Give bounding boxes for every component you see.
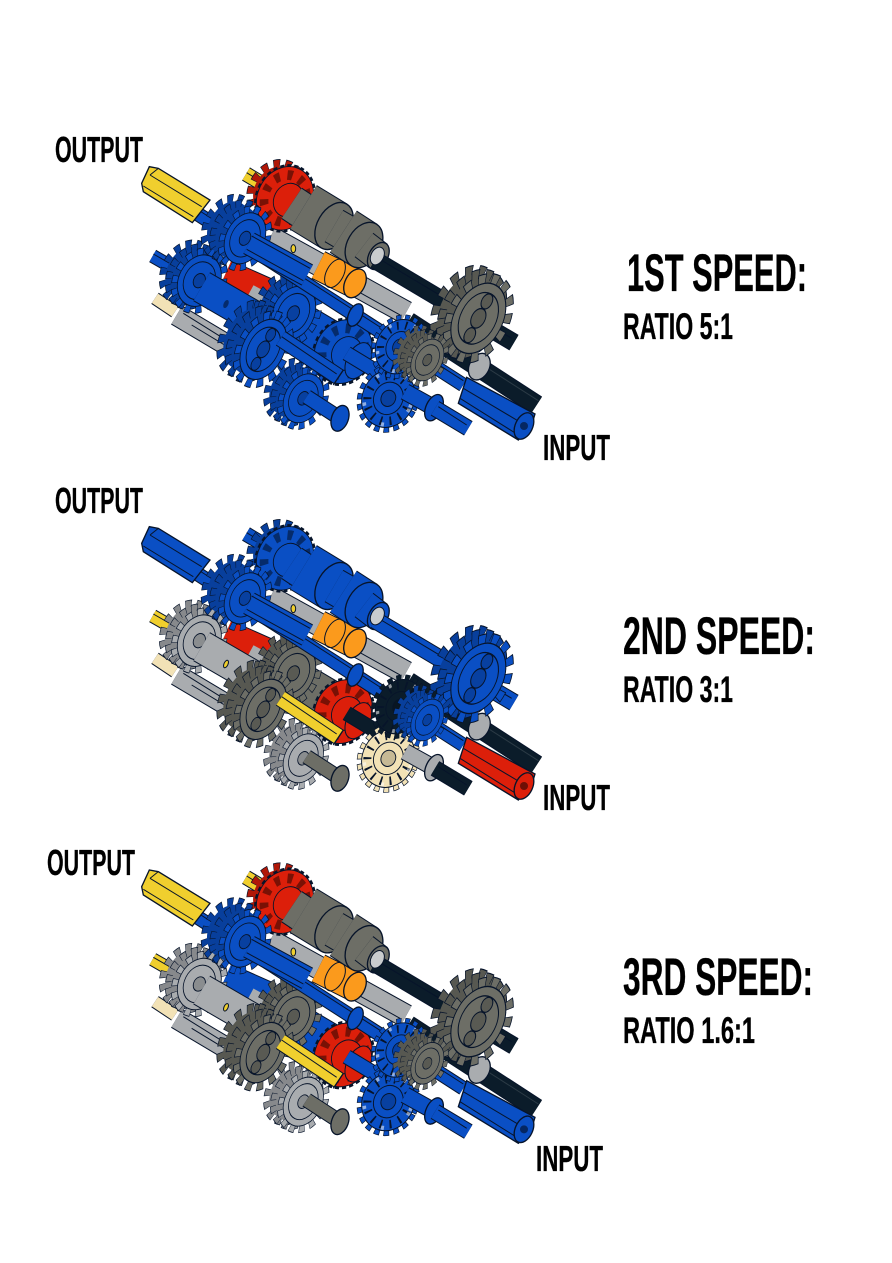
lower shaft gray xyxy=(177,669,240,712)
left gear xyxy=(153,596,233,678)
left stub xyxy=(153,957,180,975)
top blue axle xyxy=(375,618,514,703)
small main gear xyxy=(388,1026,453,1093)
lower shaft tan tip xyxy=(155,1002,175,1015)
left cylinder xyxy=(202,287,253,317)
main axle xyxy=(197,913,463,1088)
front output axle section one xyxy=(405,1095,447,1127)
center gear xyxy=(247,627,328,712)
main bevel gear xyxy=(364,669,435,745)
left cylinder xyxy=(202,990,253,1020)
front output axle section two xyxy=(435,767,468,788)
short front axle xyxy=(281,337,343,385)
middle gray axle xyxy=(270,237,406,315)
top sleeve gray xyxy=(292,899,394,978)
front three-hole gear xyxy=(210,999,300,1095)
top red gear xyxy=(241,858,326,945)
output yellow hex xyxy=(142,167,210,223)
main gear xyxy=(195,190,277,275)
center cylinder xyxy=(300,323,337,345)
front three-hole gear xyxy=(210,656,300,752)
top black axle xyxy=(375,258,514,343)
main gear xyxy=(195,550,277,635)
left gear xyxy=(153,939,233,1021)
top stub yellow xyxy=(246,876,272,893)
sleeve hub xyxy=(367,948,387,971)
front axle xyxy=(347,1057,410,1095)
rear dark gear xyxy=(422,261,521,368)
input black axle xyxy=(408,682,538,765)
main axle ring xyxy=(344,301,366,329)
middle gray axle xyxy=(270,941,406,1018)
label: output 3: OUTPUT xyxy=(47,842,135,883)
top stub blue xyxy=(246,533,272,549)
center cylinder xyxy=(300,683,337,705)
main axle xyxy=(197,570,463,745)
label: input 2: INPUT xyxy=(543,777,610,818)
front bevel gear xyxy=(349,357,427,439)
main bevel gear xyxy=(364,1012,435,1088)
middle gray axle xyxy=(270,597,406,675)
main thick section xyxy=(247,939,310,984)
rear dark gear xyxy=(422,964,521,1071)
front bevel gear xyxy=(349,1061,427,1143)
top blue gear xyxy=(241,515,326,602)
small main gear xyxy=(388,682,453,749)
lower shaft tan tip xyxy=(155,298,175,312)
small front gear xyxy=(258,714,335,793)
small front gear xyxy=(258,354,335,433)
ratio: 1.6:1: RATIO 1.6:1 xyxy=(623,1010,755,1051)
short front axle xyxy=(281,697,343,745)
input black axle xyxy=(408,1025,538,1108)
top black axle xyxy=(375,962,514,1046)
main axle ring xyxy=(344,661,366,689)
input red hex xyxy=(458,737,538,802)
orange driver ring xyxy=(318,256,371,302)
short front axle xyxy=(281,1040,343,1088)
center cylinder xyxy=(300,1027,337,1048)
front output axle section two xyxy=(435,1110,468,1132)
lower shaft tan tip xyxy=(155,658,175,672)
orange driver ring xyxy=(318,959,371,1005)
main thick section xyxy=(247,236,310,281)
main thick section xyxy=(247,596,310,641)
input bushing xyxy=(464,350,495,384)
label: input 3: INPUT xyxy=(536,1138,603,1179)
small front gear xyxy=(258,1058,335,1137)
small gear axle xyxy=(307,757,352,794)
rear blue gear xyxy=(422,621,521,728)
label: input 1: INPUT xyxy=(543,427,610,468)
label: output 1: OUTPUT xyxy=(55,129,143,170)
sleeve hub xyxy=(367,605,387,627)
label: output 2: OUTPUT xyxy=(55,480,143,521)
ratio: 3:1: RATIO 3:1 xyxy=(623,669,733,710)
left gear xyxy=(153,236,233,318)
center crown xyxy=(302,668,385,755)
center gear xyxy=(247,971,328,1055)
front axle xyxy=(347,713,410,752)
rear red crown xyxy=(225,275,272,303)
center crown xyxy=(302,308,385,395)
cylinder slot xyxy=(222,1003,230,1012)
lower shaft gray xyxy=(177,1013,240,1055)
center gear xyxy=(247,267,328,352)
main bevel gear xyxy=(364,309,435,385)
small gear axle xyxy=(307,1100,352,1137)
front output axle section one xyxy=(405,392,447,424)
input bushing xyxy=(464,710,495,744)
input black axle xyxy=(408,322,538,405)
input blue hex xyxy=(458,377,538,442)
top red gear xyxy=(241,155,326,242)
main axle ring xyxy=(344,1005,366,1032)
front output axle section two xyxy=(435,407,468,428)
orange driver ring xyxy=(318,616,371,662)
input bushing xyxy=(464,1053,495,1087)
small gear axle xyxy=(307,397,352,434)
left stub xyxy=(153,614,180,632)
cylinder slot xyxy=(222,660,230,668)
small main gear xyxy=(388,322,453,389)
sleeve hub xyxy=(367,245,387,267)
rear blue crown xyxy=(225,978,272,1007)
ratio: 5:1: RATIO 5:1 xyxy=(623,306,733,347)
front axle xyxy=(347,353,410,392)
top sleeve gray xyxy=(292,196,394,274)
front three-hole gear xyxy=(210,296,300,392)
main axle xyxy=(197,210,463,385)
left stub xyxy=(153,254,180,272)
diagram: 3rd speed gearbox xyxy=(142,858,538,1146)
diagram: 2nd speed gearbox xyxy=(142,515,538,802)
lower shaft gray xyxy=(177,309,240,352)
front bevel gear xyxy=(349,717,427,799)
diagram: 1st speed gearbox xyxy=(142,155,538,442)
output yellow hex xyxy=(142,870,210,926)
center crown xyxy=(302,1011,385,1099)
main gear xyxy=(195,894,277,978)
front output axle section one xyxy=(405,752,447,784)
left cylinder xyxy=(202,647,253,677)
top sleeve blue xyxy=(292,556,394,634)
input blue hex xyxy=(458,1081,538,1146)
top stub yellow xyxy=(246,173,272,189)
output blue hex xyxy=(142,527,210,583)
rear red crown xyxy=(225,635,272,663)
